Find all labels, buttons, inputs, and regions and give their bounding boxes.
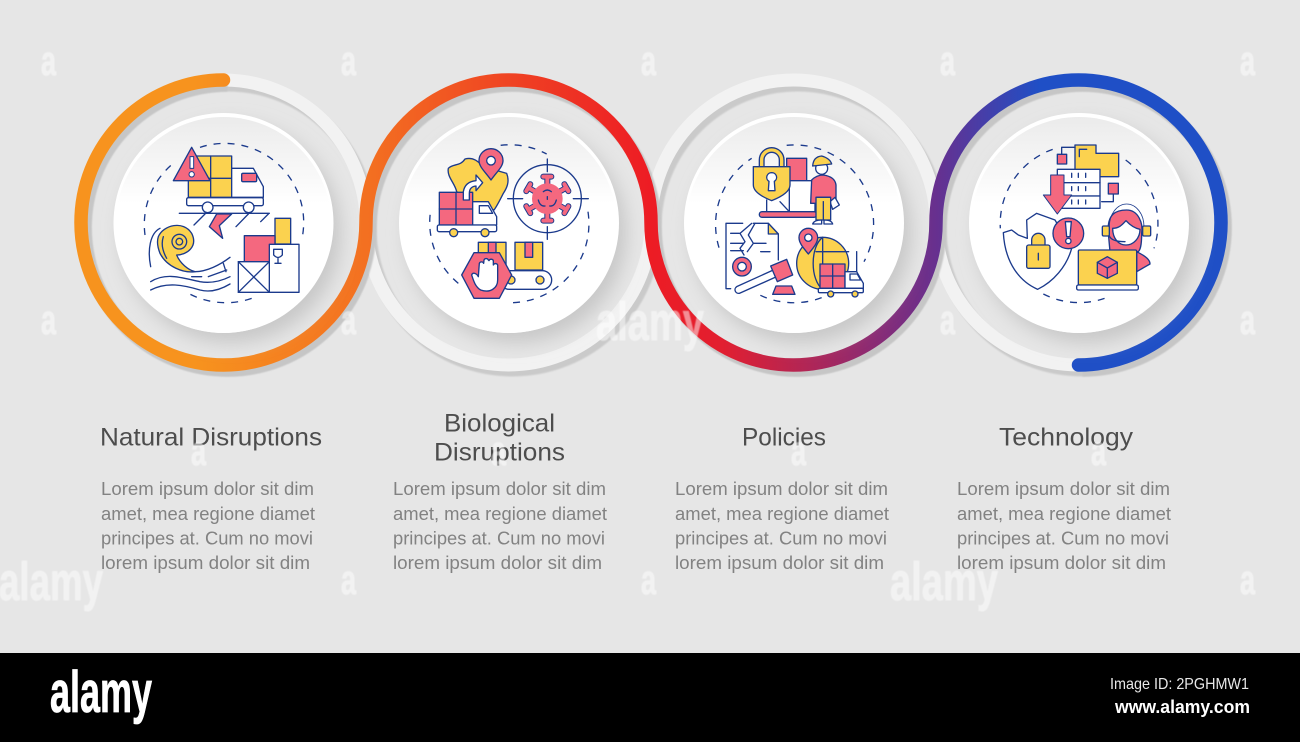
watermarks: a [1240, 556, 1255, 603]
panel text: natural disruptions [100, 424, 322, 573]
panel text: technology [957, 424, 1171, 573]
panel text: policies [675, 424, 889, 573]
plate 2 [399, 113, 626, 343]
watermarks: a [641, 37, 656, 84]
watermarks: a [1240, 296, 1255, 343]
watermarks: a [940, 37, 955, 84]
body: policies: amet, mea regione diamet [675, 503, 889, 524]
icon: natural disruptions [144, 143, 304, 303]
watermarks: a [791, 427, 806, 474]
body: policies: lorem ipsum dolor sit dim [675, 552, 884, 573]
watermarks [0, 37, 1255, 612]
watermarks: a [1240, 37, 1255, 84]
coloured ribbon shadow [85, 85, 1225, 370]
icon: biological disruptions [430, 145, 589, 303]
body: technology [957, 478, 1171, 573]
body: natural disruptions: lorem ipsum dolor sit dim [101, 552, 310, 573]
body: policies: Lorem ipsum dolor sit dim [675, 478, 888, 499]
icon: policies [716, 145, 874, 303]
watermarks: a [641, 556, 656, 603]
body: biological disruptions: amet, mea regione diamet [393, 503, 607, 524]
body: policies: principes at. Cum no movi [675, 528, 887, 548]
body: biological disruptions: lorem ipsum dolor sit dim [393, 552, 602, 573]
body: technology: amet, mea regione diamet [957, 503, 1171, 524]
plate 3 [684, 113, 912, 343]
heading: biological disruptions: Disruptions [434, 438, 565, 466]
watermarks: a [940, 296, 955, 343]
light base rings [81, 80, 1221, 365]
footer bar [0, 653, 1300, 742]
body: biological disruptions: Lorem ipsum dolor sit dim [393, 478, 606, 499]
body: biological disruptions [393, 478, 607, 573]
body: technology: lorem ipsum dolor sit dim [957, 552, 1166, 573]
body: natural disruptions: Lorem ipsum dolor sit dim [101, 478, 314, 499]
body: policies [675, 478, 889, 573]
body: biological disruptions: principes at. Cum no movi [393, 528, 605, 548]
body: natural disruptions [101, 478, 315, 573]
heading: technology: Technology [999, 424, 1134, 452]
watermarks: a [491, 427, 506, 474]
heading: natural disruptions: Natural Disruptions [100, 424, 322, 452]
heading: biological disruptions: Biological [444, 410, 555, 438]
watermarks: a [1091, 427, 1106, 474]
body: technology: principes at. Cum no movi [957, 528, 1169, 548]
heading: biological disruptions [434, 410, 565, 466]
ring shadows [85, 85, 1225, 370]
image id: Image ID: 2PGHMW1 [1110, 676, 1249, 693]
icon: technology [1000, 145, 1158, 303]
watermarks: alamy [890, 552, 998, 612]
body: technology: Lorem ipsum dolor sit dim [957, 478, 1170, 499]
plate 1 [114, 113, 341, 343]
body: natural disruptions: principes at. Cum no movi [101, 528, 313, 548]
body: natural disruptions: amet, mea regione diamet [101, 503, 315, 524]
footer logo: alamy [50, 660, 152, 725]
watermarks: alamy [0, 552, 103, 612]
coloured ribbon line [81, 80, 1221, 365]
plate 4 [969, 113, 1196, 343]
watermarks: a [191, 427, 206, 474]
panel text: biological disruptions [393, 410, 607, 573]
watermarks: a [41, 37, 56, 84]
heading: policies: Policies [742, 424, 826, 452]
watermarks: a [341, 37, 356, 84]
website: www.alamy.com [1114, 697, 1250, 717]
watermarks: a [41, 296, 56, 343]
watermarks: a [341, 296, 356, 343]
watermarks: alamy [596, 292, 704, 352]
watermarks: a [341, 556, 356, 603]
